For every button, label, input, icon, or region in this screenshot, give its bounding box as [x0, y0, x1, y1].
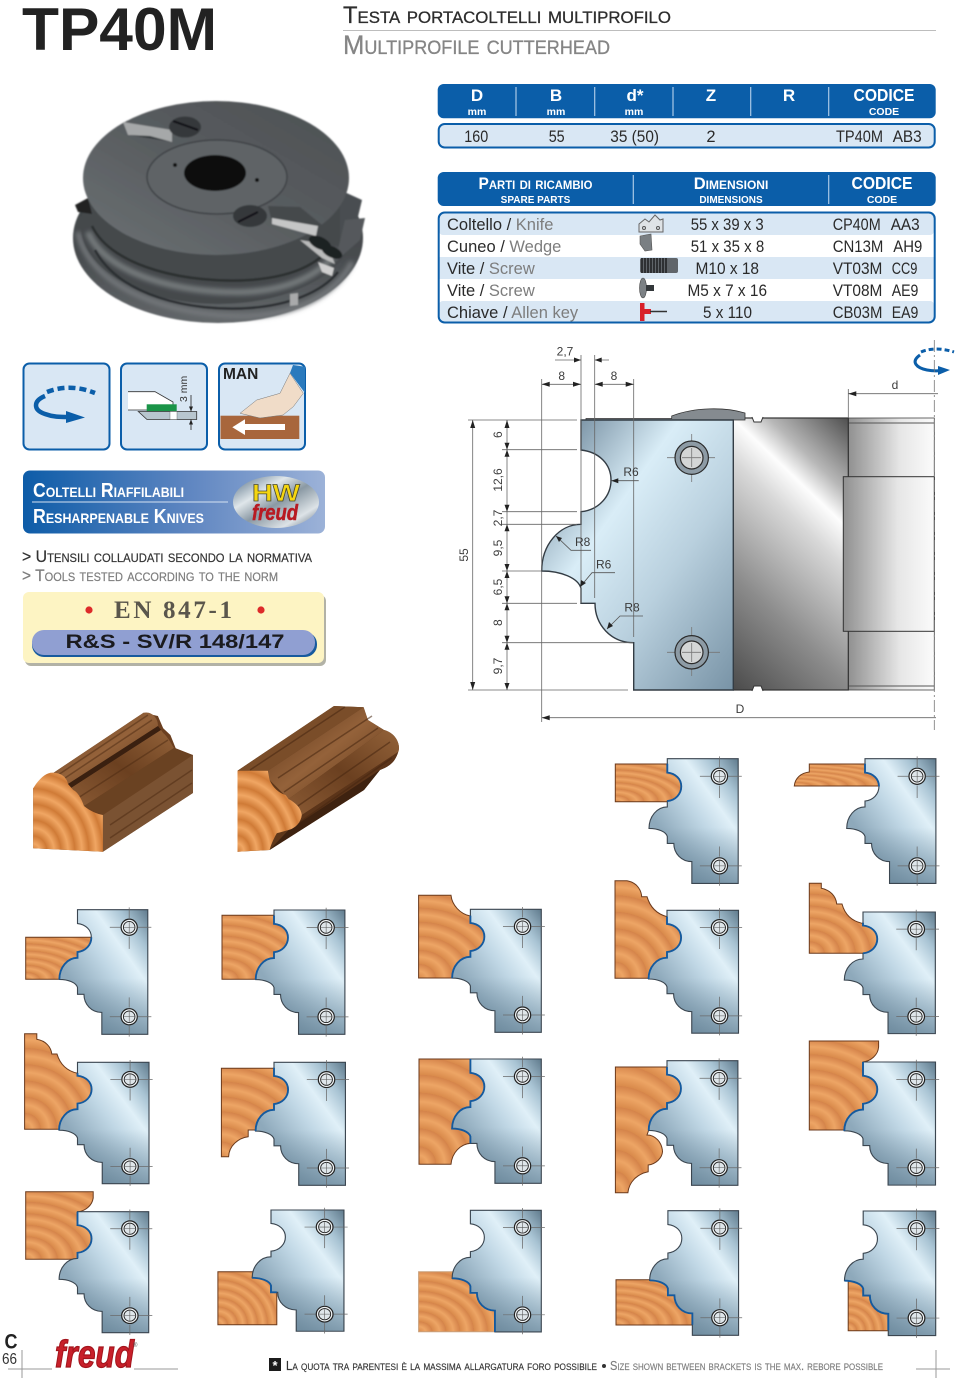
photo: cutterhead	[73, 101, 365, 323]
heading: English product name: Multiprofile cutterhead	[343, 30, 610, 60]
spare parts rows: AE9	[892, 282, 918, 300]
table row: 35 (50)	[610, 128, 659, 146]
spare parts header: CODE	[867, 194, 897, 206]
knife diagram row 3 column 4	[615, 1058, 741, 1193]
text: tested to the norm: > Utensili collaudati secondo la normativa	[22, 547, 312, 566]
spare parts header: Parti di ricambio	[478, 175, 592, 193]
dimensions: 9,7	[491, 657, 505, 674]
rotation arrow small	[915, 349, 954, 375]
spare parts rows: VT03M	[833, 260, 882, 278]
knife diagram row 2 column 5	[809, 883, 939, 1036]
footer: section letter and page number: 66	[2, 1351, 17, 1368]
table header: d*	[626, 86, 644, 105]
table row: 2	[706, 128, 716, 146]
table header: D	[471, 86, 483, 105]
dimensions: R8	[624, 600, 640, 614]
spare parts rows	[439, 212, 935, 322]
dimensions: 2,7	[491, 509, 505, 526]
spare parts rows: Chiave / Allen key	[447, 304, 579, 322]
table header: CODE	[869, 106, 899, 118]
spare parts header: SPARE PARTS	[501, 195, 571, 206]
icon: knife	[639, 215, 663, 232]
moulding sample 1	[33, 712, 193, 852]
dimensions: 6,5	[491, 578, 505, 595]
table: tool data	[438, 84, 936, 148]
spare parts rows: CC9	[892, 260, 917, 278]
clamping screws	[667, 434, 720, 676]
steel body	[733, 417, 934, 691]
knife diagram row 2 column 3	[419, 895, 545, 1035]
icon: wedge	[640, 234, 652, 251]
footnote: *	[272, 1358, 278, 1373]
badge: HW freud: freud	[252, 500, 298, 525]
icon panel: knife projection 3 mm: 3 mm	[178, 375, 190, 402]
table header: Z	[706, 86, 716, 105]
spare parts rows: 51 x 35 x 8	[691, 238, 764, 256]
dimensions: 8	[491, 619, 505, 626]
knife diagram row 1 column 5	[794, 756, 939, 886]
spare parts rows: 55 x 39 x 3	[691, 216, 764, 234]
spare parts header: CODICE	[852, 173, 912, 193]
table: spare parts	[438, 172, 936, 322]
dimensions: 9,5	[491, 539, 505, 556]
spare parts rows: Vite / Screw	[447, 282, 535, 300]
heading: Italian product name: Testa portacoltelli multiprofilo	[343, 2, 671, 29]
icon: set screw	[640, 258, 678, 273]
icon panel: manual feed: MAN	[223, 366, 258, 383]
spare parts header: DIMENSIONS	[699, 195, 763, 206]
moulding sample 2	[238, 706, 399, 852]
dimensions: 6	[491, 431, 505, 438]
footnote: Size shown between brackets is the max. rebore possible	[610, 1359, 883, 1373]
knife diagram row 3 column 3	[419, 1057, 545, 1186]
knife diagram row 3 column 5	[809, 1041, 939, 1187]
dimensions: R8	[575, 535, 591, 549]
knife diagram row 4 column 1	[26, 1192, 152, 1335]
spare parts rows: VT08M	[833, 282, 882, 300]
footnote: La quota tra parentesi è la massima allargatura foro possibile	[286, 1359, 597, 1373]
logo: freud: ®	[133, 1342, 138, 1349]
knife diagram row 4 column 4	[616, 1208, 742, 1338]
spare parts rows: AH9	[893, 238, 922, 256]
dimensions: D	[736, 702, 745, 716]
spare parts rows: M10 x 18	[696, 260, 759, 278]
knife diagram row 4 column 5	[844, 1209, 939, 1338]
spare parts rows: Coltello / Knife	[447, 216, 553, 234]
banner: resharpenable knives: Resharpenable Knives	[33, 506, 204, 528]
dimensions: R6	[623, 465, 639, 479]
table row	[439, 124, 935, 148]
knife diagram row 1 column 4	[615, 756, 742, 886]
knife diagram row 4 column 3	[419, 1208, 545, 1334]
spare parts rows: 5 x 110	[703, 304, 752, 322]
banner: resharpenable knives: Coltelli Riaffilabili	[33, 480, 184, 502]
table row: 55	[549, 128, 565, 146]
dimensions: 8	[558, 369, 565, 383]
knife diagram row 4 column 2	[218, 1208, 348, 1333]
icon: screw	[640, 278, 654, 298]
footer: section letter and page number	[2, 1330, 18, 1368]
knife diagram row 2 column 2	[222, 908, 348, 1037]
knife diagram row 2 column 4	[615, 881, 742, 1035]
callout: EN 847-1 and R&S: R&S - SV/R 148/147	[66, 631, 284, 653]
top wedge cap	[586, 409, 745, 420]
icon panel: manual feed	[219, 364, 305, 450]
table header: B	[550, 86, 562, 105]
callout: EN 847-1 and R&S	[23, 592, 326, 666]
technical drawing: main section	[457, 340, 938, 730]
spare parts rows: CP40M	[833, 216, 881, 234]
spare parts header: Dimensioni	[694, 175, 768, 193]
spare parts rows: EA9	[892, 304, 918, 322]
icon panel: rotation direction	[24, 364, 110, 450]
table header: mm	[625, 106, 643, 118]
dimensions: d	[892, 378, 898, 392]
spare parts rows: Vite / Screw	[447, 260, 535, 278]
badge: HW freud	[233, 476, 319, 528]
table header: R	[783, 86, 795, 105]
table header	[438, 84, 936, 118]
spare parts rows: M5 x 7 x 16	[688, 282, 767, 300]
logo: freud: freud	[55, 1334, 135, 1376]
callout: EN 847-1 and R&S: EN 847-1	[114, 597, 232, 624]
knife diagram row 3 column 2	[221, 1060, 349, 1188]
knife diagram row 3 column 1	[25, 1034, 153, 1186]
text: tested to the norm	[22, 547, 312, 585]
dimensions: 55	[457, 548, 471, 562]
table header: CODICE	[854, 85, 914, 105]
icon: allen key	[640, 303, 667, 321]
knife diagram row 2 column 1	[26, 907, 151, 1037]
footer: section letter and page number: C	[4, 1330, 18, 1354]
spare parts header	[438, 172, 936, 206]
banner: resharpenable knives	[23, 470, 325, 534]
spare parts rows: AA3	[891, 216, 920, 234]
footnote	[269, 1358, 883, 1373]
spare parts rows: CB03M	[833, 304, 882, 322]
badge: HW freud: HW	[252, 480, 300, 507]
dimensions	[457, 340, 938, 730]
table row: TP40M	[836, 128, 883, 146]
table header: mm	[547, 106, 565, 118]
table row: 160	[464, 128, 488, 146]
knife plate	[542, 420, 733, 690]
table row: AB3	[893, 128, 922, 146]
dimensions: 12,6	[491, 468, 505, 492]
dimensions: 2,7	[557, 344, 574, 358]
dimensions: 8	[611, 369, 618, 383]
dimensions: R6	[596, 558, 612, 572]
icon panel: knife projection 3 mm	[121, 364, 207, 450]
spare parts rows: Cuneo / Wedge	[447, 238, 561, 256]
text: tested to the norm: > Tools tested according to the norm	[22, 566, 278, 585]
table header: mm	[468, 106, 486, 118]
spare parts rows: CN13M	[833, 238, 883, 256]
